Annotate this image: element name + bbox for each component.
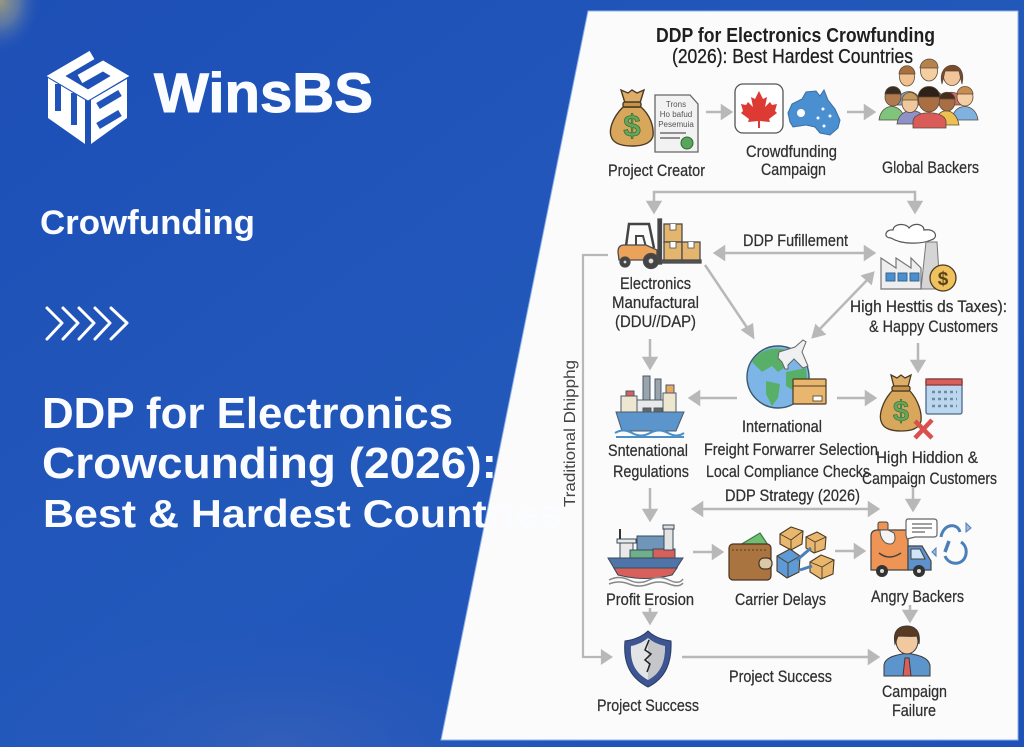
text: international freight: Freight Forwarrer Selection: [704, 440, 878, 459]
text: crowdfunding campaign: Campaign: [761, 160, 826, 179]
text: DDP fulfillment: DDP Fufillement: [743, 231, 848, 250]
icon: money bag with calendar and cross: $: [893, 396, 909, 428]
arrow: ship to wallet: [693, 546, 722, 558]
arrow: taxes to fees: [912, 343, 924, 371]
arrow: customers to angry: [907, 487, 919, 510]
text: regulations: Regulations: [613, 462, 689, 481]
icon: money bag with calendar and cross: [880, 375, 962, 438]
text: electronics manufacturer: Manufactural: [612, 293, 699, 312]
main heading: Best & Hardest Countries: [43, 493, 563, 536]
text: international freight: [704, 417, 878, 481]
icon: document: [655, 95, 698, 152]
arrow: strategy double: [693, 503, 878, 515]
arrow: regulations to profit: [644, 488, 656, 520]
arrow: manufacturer to freight: [705, 265, 753, 337]
text: electronics manufacturer: [612, 274, 699, 331]
text: angry backers: Angry Backers: [871, 587, 964, 606]
icon: canada flag card: [735, 84, 783, 133]
text: hidden fees: [862, 448, 997, 488]
panel: white flowchart card: [441, 11, 1018, 740]
arrow: left bracket traditional shipping: [583, 255, 611, 663]
text: high taxes: [850, 297, 1007, 336]
arrow: profit to shield: [644, 608, 656, 623]
text: electronics manufacturer: (DDU//DAP): [615, 312, 696, 331]
chart title: [656, 25, 935, 68]
main heading: [42, 389, 563, 536]
icon: forklift with boxes: [618, 219, 701, 268]
text: high taxes: High Hesttis ds Taxes):: [850, 297, 1007, 316]
main heading: DDP for Electronics: [42, 389, 453, 438]
icon: cracked shield: [625, 631, 671, 687]
arrow: shield to failure: [682, 651, 878, 663]
icon: globe with plane and parcel: [747, 340, 826, 408]
arrow: creator to campaign: [706, 106, 731, 118]
arrow: freight to regulations: [690, 392, 737, 404]
icon: chevrons: [47, 308, 127, 339]
icon: regulations ship: [615, 376, 684, 437]
icon: document: Pesemuia: [658, 120, 694, 129]
arrow: factory to freight double: [813, 273, 873, 337]
text: crowdfunding campaign: [746, 142, 837, 179]
text: global backers: Global Backers: [882, 158, 979, 177]
text: project success: Project Success: [597, 696, 699, 715]
icon: factory with cloud and coin: [881, 224, 956, 291]
icon: money bag: [610, 90, 653, 146]
text: regulations: [608, 441, 689, 481]
text: project success middle: Project Success: [729, 667, 832, 686]
icon: document: Ho bafud: [660, 110, 692, 119]
text: hidden fees: Campaign Customers: [862, 469, 997, 488]
text: campaign failure: [882, 682, 947, 720]
icon: businessman: [884, 626, 930, 676]
text: international freight: Local Compliance Checks: [706, 462, 870, 481]
arrow: freight to fees: [837, 392, 875, 404]
icon: tangled boxes: [777, 527, 834, 579]
text: traditional shipping vertical: Traditional Dhipphg: [562, 360, 579, 507]
icon: australia map: [788, 90, 840, 135]
text: crowdfunding campaign: Crowdfunding: [746, 142, 837, 161]
text: high taxes: & Happy Customers: [869, 317, 998, 336]
text: campaign failure: Campaign: [882, 682, 947, 701]
arrow: split bracket: [648, 192, 921, 212]
text: international freight: International: [742, 417, 822, 436]
icon: wallet with cash: [729, 533, 772, 580]
text: campaign failure: Failure: [892, 701, 936, 720]
arrow: boxes to truck: [835, 545, 864, 557]
text: profit erosion: Profit Erosion: [606, 590, 694, 609]
icon: money bag: $: [623, 108, 641, 143]
logo: WinsBS cube: [48, 55, 127, 144]
text: electronics manufacturer: Electronics: [620, 274, 691, 293]
brand name: WinsBS: [154, 61, 373, 124]
main heading: Crowcunding (2026):: [42, 439, 497, 488]
icon: delivery truck with speech and cycle: [871, 519, 971, 577]
arrow: fulfillment double: [715, 247, 874, 259]
arrow: angry to failure: [904, 605, 916, 621]
category label: Crowfunding: [40, 204, 255, 242]
text: project creator: Project Creator: [608, 161, 705, 180]
chart title: DDP for Electronics Crowfunding: [656, 25, 935, 47]
text: hidden fees: High Hiddion &: [876, 448, 979, 467]
chart title: (2026): Best Hardest Countries: [672, 46, 913, 68]
arrow: campaign to backers: [847, 106, 874, 118]
text: carrier delays: Carrier Delays: [735, 590, 826, 609]
text: DDP strategy: DDP Strategy (2026): [725, 486, 860, 505]
icon: document: Trons: [666, 100, 686, 109]
icon: cargo ship: [608, 525, 683, 586]
icon: factory with cloud and coin: $: [938, 269, 949, 290]
icon: global backers: [879, 59, 978, 128]
arrow: manufacturer to regulations: [644, 339, 656, 368]
text: regulations: Sntenational: [608, 441, 688, 460]
